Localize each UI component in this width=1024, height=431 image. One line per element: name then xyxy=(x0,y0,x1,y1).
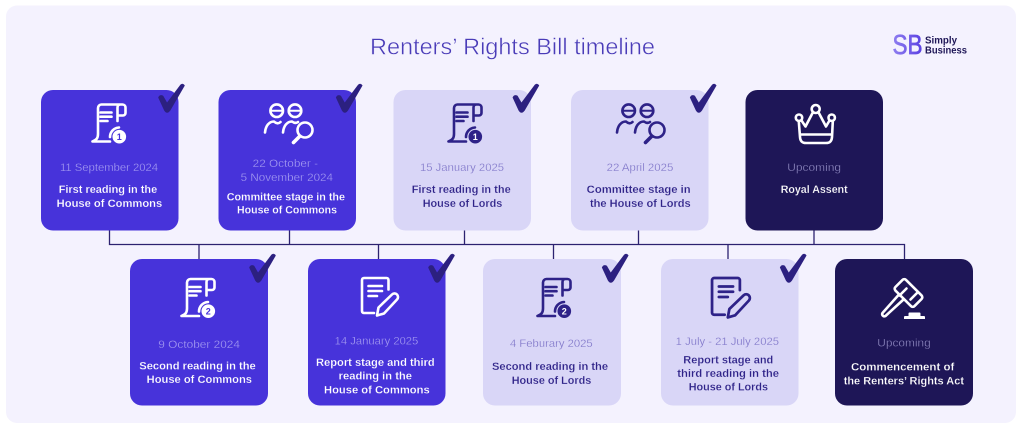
card: Report stage and third reading in the House of Commons xyxy=(308,254,454,406)
stage name xyxy=(412,184,511,210)
title: Renters’ Rights Bill timeline xyxy=(370,34,655,60)
stage name: House of Commons xyxy=(237,205,337,217)
card: Commencement of the Renters' Rights Act xyxy=(835,259,973,406)
stage name: third reading in the xyxy=(677,368,779,380)
card: Second reading in the House of Lords xyxy=(483,254,628,406)
card: Committee stage in the House of Lords xyxy=(571,84,716,230)
card: Report stage and third reading in the House of Lords xyxy=(661,254,806,406)
icon: document with pencil xyxy=(362,278,398,316)
date: 14 January 2025 xyxy=(335,335,418,347)
stage name: Committee stage in xyxy=(587,184,691,196)
icon: people with magnifier xyxy=(265,104,312,142)
date: 22 October - xyxy=(253,158,318,170)
stage name xyxy=(316,357,435,396)
date: 9 October 2024 xyxy=(158,339,240,351)
check mark xyxy=(336,84,362,112)
stage name: Second reading in the xyxy=(492,361,608,373)
date xyxy=(241,158,333,184)
logo: Simply Business: Business xyxy=(925,46,967,56)
icon: scroll with number 1 xyxy=(448,104,482,144)
date: 11 September 2024 xyxy=(60,162,158,174)
stage name: the House of Lords xyxy=(590,198,691,210)
stage name xyxy=(492,361,608,387)
logo: Simply Business: Simply xyxy=(925,36,957,46)
logo: Simply Business xyxy=(892,29,967,60)
stage name: Committee stage in the xyxy=(227,192,345,204)
check mark xyxy=(428,254,454,282)
stage name: Royal Assent xyxy=(781,184,848,196)
stage name: House of Commons xyxy=(147,374,252,386)
check mark xyxy=(780,254,806,282)
stage name: the Renters’ Rights Act xyxy=(844,375,964,387)
icon: document with pencil xyxy=(712,278,750,317)
check mark xyxy=(513,84,539,112)
stage name: First reading in the xyxy=(412,184,511,196)
logo: Simply Business: SB xyxy=(892,29,922,60)
stage name xyxy=(57,184,162,210)
check mark xyxy=(250,254,276,282)
icon: scroll with number 2 xyxy=(538,279,571,318)
timeline connectors xyxy=(110,230,904,259)
card: Royal Assent xyxy=(746,90,883,230)
icon: scroll with number 2: 2 xyxy=(562,306,567,316)
date: 22 April 2025 xyxy=(607,162,673,174)
icon: scroll with number 1: 1 xyxy=(117,132,122,142)
card: First reading in the House of Commons xyxy=(41,84,184,230)
card: First reading in the House of Lords xyxy=(394,84,539,230)
check mark xyxy=(158,84,184,112)
check mark xyxy=(690,84,716,112)
icon: scroll with number 1 xyxy=(92,104,126,144)
stage name: House of Commons xyxy=(57,198,162,210)
date: 5 November 2024 xyxy=(241,172,333,184)
stage name: Report stage and xyxy=(683,354,773,366)
stage name: House of Lords xyxy=(512,375,591,387)
stage name xyxy=(139,360,256,386)
icon: crown xyxy=(796,105,835,143)
card: Second reading in the House of Commons xyxy=(130,254,276,406)
status: Upcoming xyxy=(877,338,931,350)
stage name: Commencement of xyxy=(851,362,955,374)
stage name xyxy=(677,354,779,394)
icon: people with magnifier xyxy=(617,104,664,142)
stage name: House of Lords xyxy=(689,382,768,394)
icon: scroll with number 1: 1 xyxy=(473,132,478,142)
status: Upcoming xyxy=(787,162,841,174)
stage name: First reading in the xyxy=(59,184,157,196)
date: 15 January 2025 xyxy=(420,162,504,174)
icon: scroll with number 2: 2 xyxy=(206,306,211,316)
card: Committee stage in the House of Commons xyxy=(218,84,362,230)
stage name: Second reading in the xyxy=(139,360,256,372)
stage name: Report stage and third xyxy=(316,357,435,369)
stage name xyxy=(844,362,964,387)
check mark xyxy=(602,254,628,282)
stage name: House of Lords xyxy=(423,198,502,210)
stage name: House of Commons xyxy=(324,384,430,396)
date: 1 July - 21 July 2025 xyxy=(676,336,779,348)
icon: scroll with number 2 xyxy=(182,279,215,318)
stage name xyxy=(587,184,691,210)
icon: gavel xyxy=(882,278,925,319)
stage name: reading in the xyxy=(339,371,412,383)
stage name xyxy=(227,192,345,217)
date: 4 Feburary 2025 xyxy=(510,338,593,350)
